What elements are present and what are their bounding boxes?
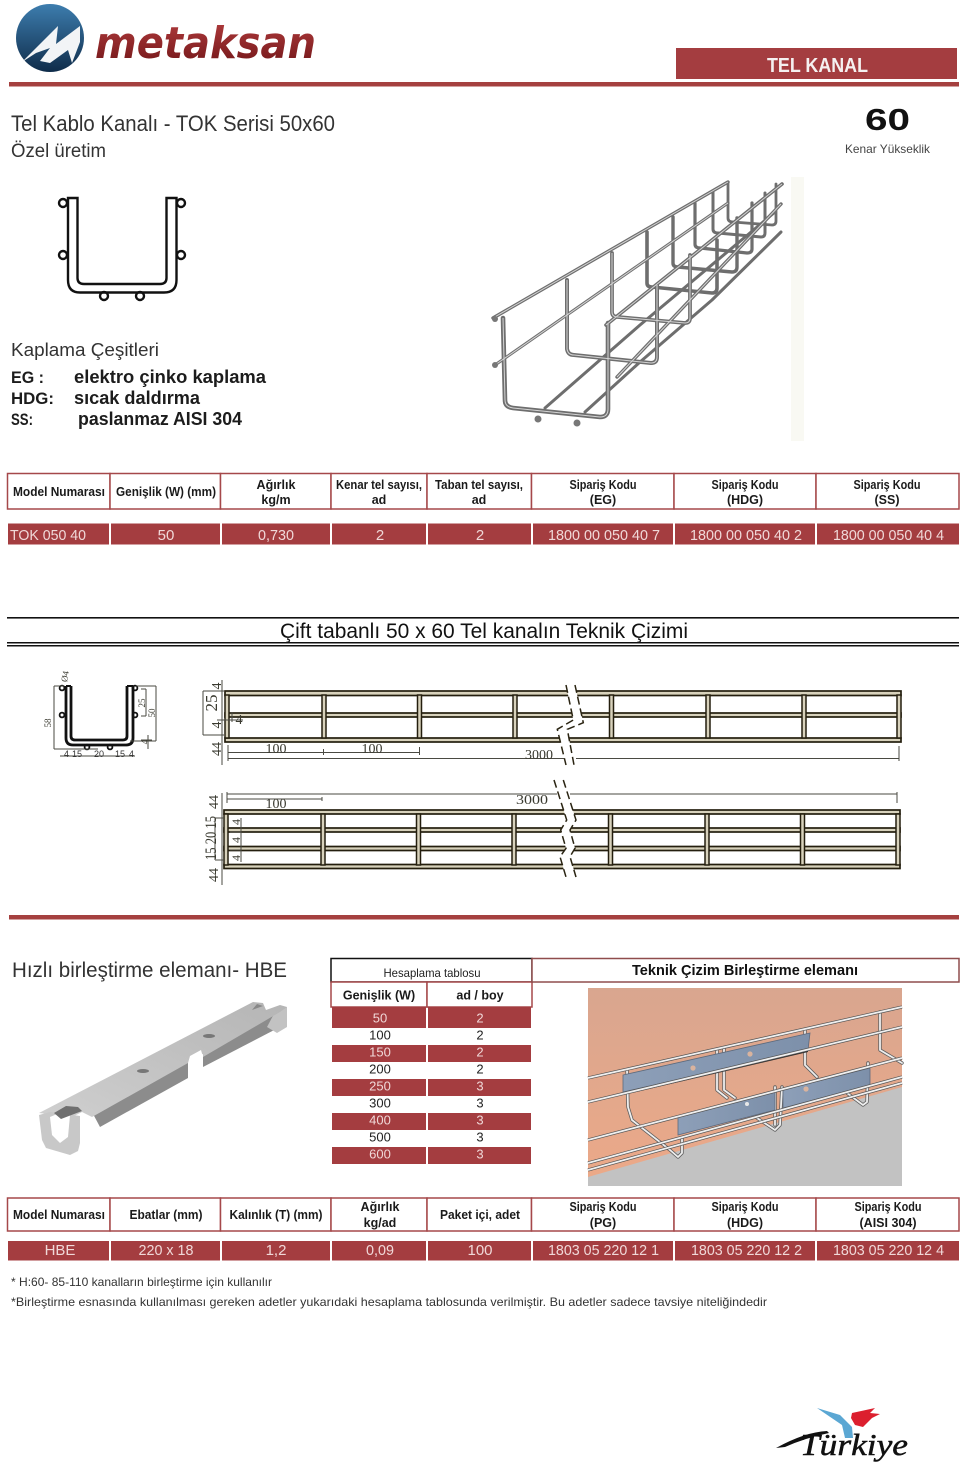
table: product data row: 0,730: [258, 527, 294, 544]
table: connector data row: HBE: [45, 1242, 75, 1259]
table: connector header: (HDG): [727, 1216, 763, 1230]
table: connector header: Kalınlık (T) (mm): [230, 1208, 322, 1222]
table: connector data row: [8, 1241, 959, 1260]
logo: Türkiye: Türkiye: [800, 1427, 908, 1462]
table: product data row: 2: [376, 527, 384, 544]
table: connector header: (AISI 304): [860, 1216, 916, 1230]
header rule: [9, 82, 959, 86]
table: product header: Genişlik (W) (mm): [116, 485, 216, 499]
table: calculation: 400: [369, 1112, 391, 1128]
table: product data row: 1800 00 050 40 7: [548, 527, 660, 544]
table: product header: Sipariş Kodu: [712, 478, 778, 492]
title: [11, 111, 335, 162]
table: calculation: Hesaplama tablosu: [384, 966, 480, 980]
drawing: bottom view: 100: [266, 797, 286, 812]
table: connector header: kg/ad: [364, 1216, 396, 1230]
drawing: bottom view: 44: [207, 795, 222, 809]
coating types: sıcak daldırma: [74, 388, 201, 408]
drawing: side view: 44: [210, 742, 225, 756]
table: calculation: 300: [369, 1096, 391, 1110]
table: calculation: 150: [369, 1044, 391, 1060]
table: connector data row: 1803 05 220 12 2: [691, 1242, 802, 1259]
table: calculation: 600: [369, 1146, 391, 1162]
table: calculation: 3: [476, 1130, 484, 1144]
drawing: side view: 4: [236, 713, 242, 728]
table: product header: [8, 474, 959, 509]
heading box: connector drawing: [532, 958, 959, 982]
image: HBE connector: [39, 1002, 287, 1155]
table: connector data row: 1,2: [266, 1242, 286, 1259]
table: product data row: 50: [158, 527, 174, 544]
table: product data row: 1800 00 050 40 4: [833, 527, 944, 544]
title: Tel Kablo Kanalı - TOK Serisi 50x60: [11, 111, 335, 136]
drawing: section with dimensions: 50: [147, 708, 157, 718]
table: product header: kg/m: [261, 493, 291, 507]
title: Özel üretim: [11, 141, 106, 162]
coating types: [11, 340, 267, 429]
drawing: bottom view: 44: [207, 868, 222, 882]
footnotes: *Birleştirme esnasında kullanılması gereken adetler yukarıdaki hesaplama tablosunda verilmiştir. Bu adetler sadece tavsiye niteliğindedir: [11, 1295, 767, 1309]
table: product header: Sipariş Kodu: [570, 478, 636, 492]
table: connector header: Model Numarası: [13, 1208, 105, 1222]
table: product header: Model Numarası: [13, 485, 105, 499]
drawing: bottom view: [203, 780, 900, 885]
coating types: EG :: [11, 368, 44, 387]
side height value: [845, 102, 931, 156]
table: connector header: (PG): [590, 1216, 616, 1230]
table: product header: (HDG): [727, 493, 763, 507]
drawing: section with dimensions: 4: [129, 749, 134, 759]
drawing: section with dimensions: [43, 670, 157, 759]
heading: technical drawing: Çift tabanlı 50 x 60 Tel kanalın Teknik Çizimi: [280, 620, 688, 643]
table: calculation: 3: [476, 1146, 484, 1162]
table: calculation: 2: [476, 1062, 484, 1076]
table: calculation: ad / boy: [456, 988, 504, 1002]
coating types: HDG:: [11, 389, 54, 408]
coating types: SS:: [11, 410, 33, 429]
table: calculation: 2: [476, 1010, 484, 1026]
logo: Türkiye: [776, 1408, 908, 1462]
section rule: [9, 915, 959, 920]
table: connector data row: 0,09: [366, 1242, 394, 1259]
table: calculation: 3: [476, 1112, 484, 1128]
drawing: bottom view: 15 20 15: [203, 816, 220, 860]
table: product header: (EG): [590, 493, 616, 507]
table: calculation: 100: [369, 1028, 391, 1042]
heading: HBE: Hızlı birleştirme elemanı- HBE: [12, 959, 287, 982]
coating types: paslanmaz AISI 304: [78, 409, 242, 429]
drawing: section with dimensions: 15: [72, 749, 82, 759]
drawing: bottom view: 4: [229, 819, 243, 825]
table: connector header: Paket içi, adet: [440, 1208, 521, 1222]
drawing: section with dimensions: 4: [140, 739, 150, 744]
table: product header: Ağırlık: [257, 478, 295, 492]
drawing: side view: 25: [202, 694, 221, 712]
drawing: section with dimensions: 25: [137, 698, 147, 708]
table: calculation: [331, 958, 532, 1164]
table: connector data row: 100: [467, 1242, 493, 1259]
table: product data row: TOK 050 40: [10, 527, 86, 544]
table: product header: Sipariş Kodu: [854, 478, 920, 492]
table: product header: (SS): [874, 493, 900, 507]
table: calculation: 3: [476, 1078, 484, 1094]
icon: tray cross-section: [59, 198, 185, 300]
side height value: Kenar Yükseklik: [845, 142, 931, 156]
table: calculation: 500: [369, 1130, 391, 1144]
table: product header: ad: [372, 493, 386, 507]
banner: TEL KANAL: [676, 48, 957, 79]
image: installed connector: [588, 988, 902, 1186]
table: calculation: 2: [476, 1028, 484, 1042]
table: connector header: Sipariş Kodu: [712, 1200, 778, 1214]
table: connector header: Ebatlar (mm): [130, 1208, 202, 1222]
table: connector header: Ağırlık: [361, 1200, 399, 1214]
drawing: bottom view: 4: [229, 837, 243, 843]
drawing: section with dimensions: 58: [43, 718, 53, 728]
table: calculation: 250: [369, 1078, 391, 1094]
coating types: elektro çinko kaplama: [74, 367, 267, 387]
footnotes: * H:60- 85-110 kanalların birleştirme için kullanılır: [11, 1275, 272, 1289]
coating types: Kaplama Çeşitleri: [11, 340, 159, 360]
drawing: side view: 100: [266, 742, 286, 757]
drawing: side view: 3000: [525, 747, 553, 762]
drawing: side view: [202, 680, 901, 765]
image: wire cable tray: [492, 177, 804, 441]
drawing: section with dimensions: 4: [64, 749, 69, 759]
table: product data row: 1800 00 050 40 2: [690, 527, 802, 544]
table: product header: Taban tel sayısı,: [435, 478, 523, 492]
drawing: section with dimensions: Ø4: [59, 670, 71, 683]
banner: TEL KANAL: TEL KANAL: [767, 55, 868, 77]
table: product header: Kenar tel sayısı,: [336, 478, 422, 492]
table: connector header: Sipariş Kodu: [570, 1200, 636, 1214]
drawing: section with dimensions: 15: [115, 749, 125, 759]
drawing: side view: 4: [210, 722, 225, 728]
table: calculation: 2: [476, 1044, 484, 1060]
table: connector header: Sipariş Kodu: [854, 1200, 922, 1214]
table: connector data row: 1803 05 220 12 4: [833, 1242, 944, 1259]
table: connector data row: 1803 05 220 12 1: [548, 1242, 659, 1259]
drawing: bottom view: 3000: [516, 793, 548, 808]
table: calculation: 50: [373, 1010, 387, 1026]
drawing: side view: 100: [362, 742, 382, 757]
drawing: side view: 4: [210, 682, 225, 690]
table: calculation: Genişlik (W): [343, 988, 415, 1002]
table: connector data row: 220 x 18: [138, 1242, 194, 1259]
table: calculation: 200: [369, 1062, 391, 1076]
table: product header: ad: [472, 493, 486, 507]
heading box: connector drawing: Teknik Çizim Birleştirme elemanı: [632, 962, 858, 979]
table: connector header: [8, 1198, 959, 1231]
drawing: bottom view: 4: [229, 855, 243, 861]
table: calculation: 3: [476, 1096, 484, 1110]
side height value: 60: [865, 102, 910, 137]
logo: metaksan: [16, 4, 316, 72]
drawing: section with dimensions: 20: [94, 749, 104, 759]
footnotes: [11, 1275, 767, 1309]
table: product data row: 2: [476, 527, 484, 544]
logo: metaksan: metaksan: [95, 18, 316, 69]
table: product data row: [8, 524, 959, 544]
